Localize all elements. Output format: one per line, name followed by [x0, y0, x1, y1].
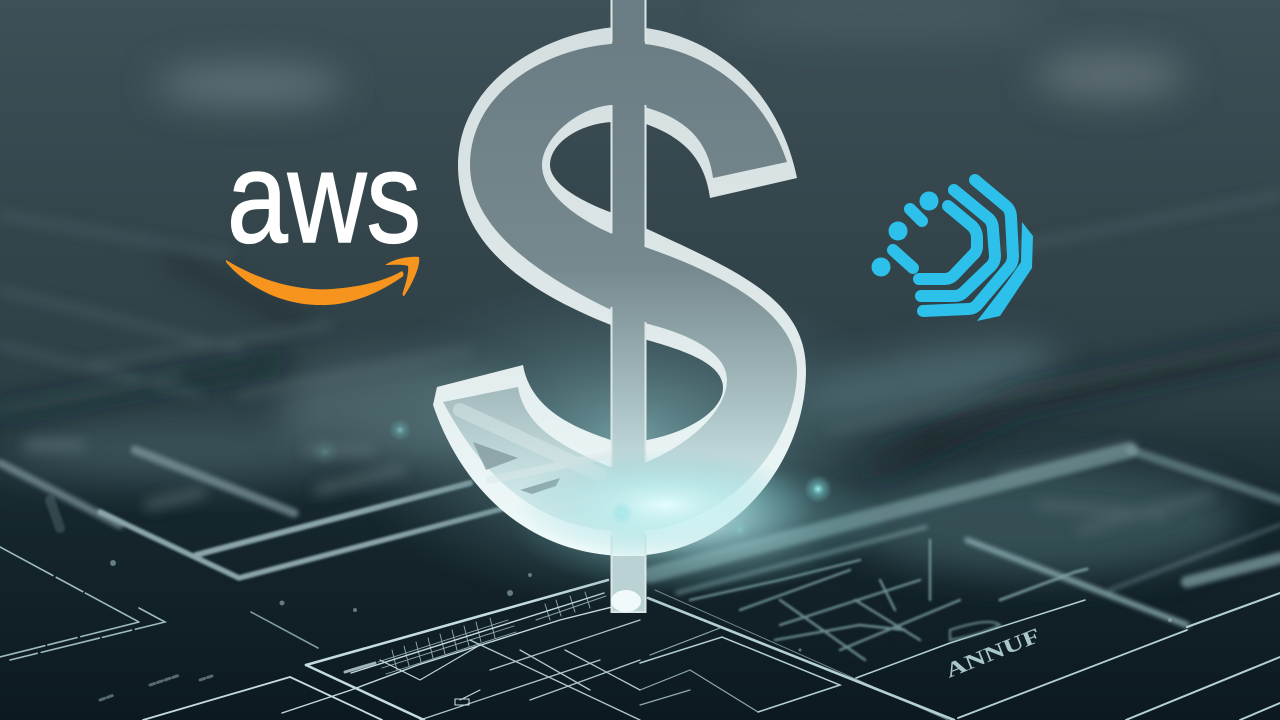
dark bands: [0, 260, 1280, 465]
schematic label: ANNUF: [942, 623, 1044, 683]
blurred glowing band right: [650, 450, 1280, 625]
logo: aws: [226, 124, 421, 305]
blueprint panel right: [640, 590, 1280, 720]
glow behind dollar: [330, 270, 930, 610]
blueprint schematic right: [690, 540, 1087, 660]
blueprint frame left: [50, 483, 505, 578]
chevrons: [919, 180, 1013, 311]
blueprint fine lines left: [0, 547, 318, 700]
glass front face: [443, 44, 797, 532]
logo: cyan octagon mark: [872, 180, 1033, 321]
aws wordmark: aws: [227, 124, 421, 270]
background haze: [0, 0, 1240, 575]
smile arrow: [385, 257, 419, 296]
blurred far blueprint lines: [0, 195, 1280, 530]
refracted lines inside glass: [460, 410, 620, 510]
glass rim silhouette: [433, 26, 806, 556]
amazon smile: [226, 260, 404, 305]
light particles: [311, 419, 832, 540]
dollar sign: [433, 0, 815, 612]
outer segment: [977, 222, 1033, 321]
specks: [110, 560, 1172, 652]
dots: [872, 192, 938, 276]
bar edges over the counters: [612, 0, 646, 612]
vertical bar: [612, 0, 645, 612]
blueprint panel centre: [143, 580, 640, 720]
bar base highlight: [611, 590, 641, 612]
dashes: [893, 209, 922, 268]
inner light: [515, 450, 815, 560]
bar lower shade: [612, 556, 645, 612]
blurred near blueprint frame left: [0, 450, 294, 525]
